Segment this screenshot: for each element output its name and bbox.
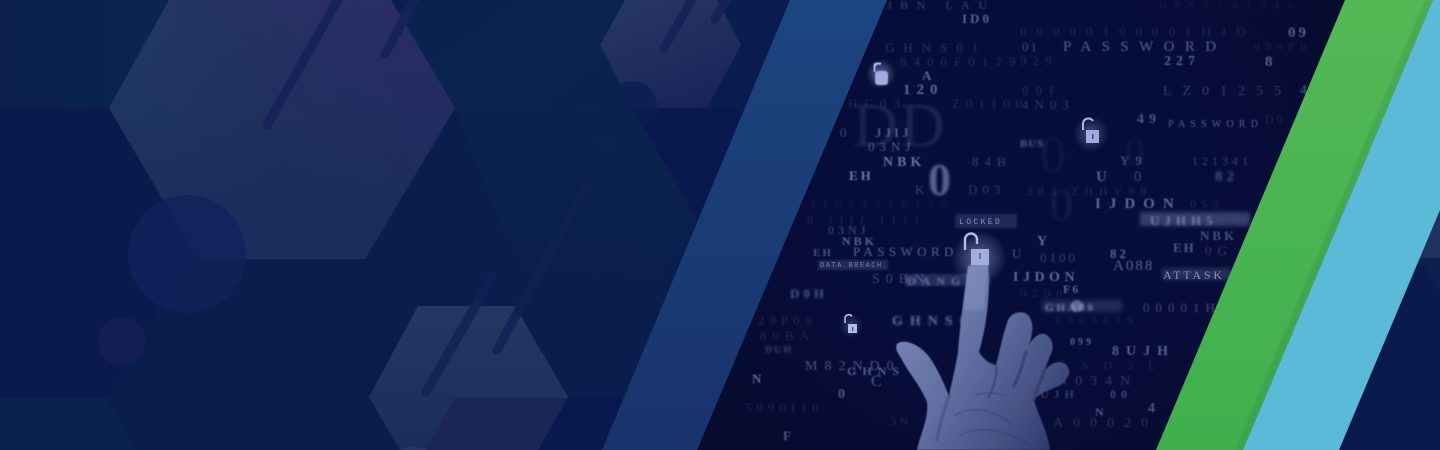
data text left column: M82ND0 [805,359,901,374]
icon: open lock small [841,314,861,336]
data text right column: 01 [1022,39,1039,54]
data text left column: EH [813,247,833,259]
data text left column: D03 [968,182,1005,197]
blurred glowing text bands: ATTASK [1163,268,1225,282]
upper right hexagon [600,0,741,108]
data text right column: LZ01255 [1163,84,1292,99]
blurred glowing text bands: DANGER [907,274,995,288]
data text right column: 4 [1148,401,1155,416]
diagonal band: cyan [1243,0,1440,450]
data text right column: Y [1037,234,1047,249]
data text left column: HC03 [848,96,907,111]
data text left column: K [915,182,925,197]
blurred glowing text bands: BUS [1020,138,1044,150]
data text left column: Z01100 [952,96,1028,111]
data text right column: 0200 [1020,286,1068,300]
large blurred letters: D [853,92,898,160]
blurred glowing text bands: D0H [790,286,828,301]
blurred glowing text bands: DATA BREACH [820,262,883,270]
data text left column: PASSWORD [853,244,958,259]
data text left column: 29P0S [758,313,817,328]
data text left column: 03NJ [828,223,869,237]
data text right column: 0305099 [1055,313,1139,327]
large blurred letters: 0 [1050,179,1073,230]
data text left column: NBK [842,234,877,248]
data text left column: GHNS01 [885,40,987,55]
data text left column: 8400F0129 [900,54,1022,69]
data text left column: 1100421E100 [810,197,954,211]
data text right column: PASSWORD [1168,119,1263,130]
data text right column: 099 [1070,337,1094,348]
data text right column: 8UJH [1112,344,1175,359]
data text right column: 0G [1205,243,1233,258]
data text right column: 00001H [1143,300,1221,315]
data text right column: 227 [1164,54,1200,69]
data text left column: S0BN [872,272,930,287]
data text right column: 4 [1300,83,1307,98]
data text right column: N034N [1057,374,1138,389]
data text left column: 0 JJIJ 1111 [807,213,926,227]
data text right column: 00F [1022,83,1063,98]
data text right column: PASSWORD [1063,39,1227,55]
icon: open lock top left [868,60,894,88]
diagonal band: blue [602,0,887,450]
data text right column: 0 A D 5 L [1060,358,1161,372]
data text right column: 09 [1288,25,1309,41]
data text right column: 121341 [1192,154,1252,168]
data text left column: ID0 [962,11,992,26]
data text left column: N [752,371,762,386]
data text left column: F [783,428,791,443]
lock glow [954,232,1004,280]
data text right column: 49 [1137,112,1161,127]
icon: hand pointing at glowing lock [896,230,1069,450]
blurred glowing text bands: DUH [765,345,793,356]
right corner panel [1339,210,1440,450]
data text right column: EH [1173,240,1196,255]
blurred glowing text bands: GHNS01 [892,314,988,329]
decorative circles [98,81,657,365]
data text left column: 120 [903,82,944,98]
data text right column: 00 [1110,387,1132,401]
data text right column: 82 [1110,246,1129,261]
data text right column: 099F0 [1254,41,1312,53]
blurred glowing text bands: GHA00 [1045,302,1096,314]
data text right column [1012,0,1312,431]
data text left column [745,0,1028,443]
data text left column: 3N [890,414,913,428]
data text right column: UJH [1040,387,1079,401]
lower hexagon [369,306,568,450]
data text left column: 5990I10 [745,400,823,415]
panel: code photo [697,0,1345,450]
data text left column: EH [849,168,874,183]
data text right column: D0 [1265,112,1286,126]
data text right column: F6 [1063,282,1080,296]
data text left column: 80BA [760,328,815,343]
data text left column: 0 [840,125,846,140]
hand silhouette [896,262,1069,450]
data text left column: 0 [838,387,845,402]
data text right column: 0100 [1040,250,1078,265]
large blurred letters [856,104,1142,219]
data text right column: U [1096,169,1110,185]
diagonal band: green [1156,0,1433,450]
large blurred letters: 0 [928,154,951,205]
data text left column: GHNS [847,364,905,378]
data text right column: 383 ZHHV99 [1026,184,1152,198]
bright lock [965,233,977,250]
data text left column: JJIJ [875,125,912,140]
data text right column: Y9 [1120,153,1148,168]
data text left column: 03NJ [868,139,915,154]
data text right column: A00020 [1053,416,1158,431]
large blurred letters: D [900,92,945,160]
data text right column: 0 [1134,169,1142,185]
hand shadow creases [937,352,1044,445]
diagonal sticks [267,0,728,392]
data text right column: N [1095,405,1104,419]
data text left column: A [922,68,932,83]
blurred glowing text bands: UJHH5 [1150,213,1218,228]
data text right column: A088 [1113,258,1154,274]
large blurred letters: 0 [1125,129,1145,174]
data text right column: 8 [1265,54,1272,70]
blurred glowing text bands: LOCKED [959,218,1002,227]
data text right column: 4N03 [1022,97,1075,112]
data text right column: 82 [1215,169,1238,185]
fingertip highlight [964,265,988,310]
data text left column: C [871,373,882,390]
large blurred letters: 0 [1040,127,1066,184]
data text right column: IJDON [1013,270,1079,285]
icon: open lock top right [1076,118,1106,150]
data text right column: U [1012,246,1022,261]
data text right column: 0S3 [1190,197,1224,211]
data text right column: IJDON [1095,196,1182,212]
data text right column: 00000100001HJD [1020,24,1255,39]
data text left column: NBK [883,155,925,170]
data text right column: NBK [1200,228,1237,243]
photo background [697,0,1345,450]
data text right column: 929 [1020,53,1058,68]
blurred glowing text bands [765,138,1250,356]
data text left column: 84B [972,154,1012,169]
background: tonal hexagon panels [0,0,790,450]
large hexagon [109,0,455,259]
